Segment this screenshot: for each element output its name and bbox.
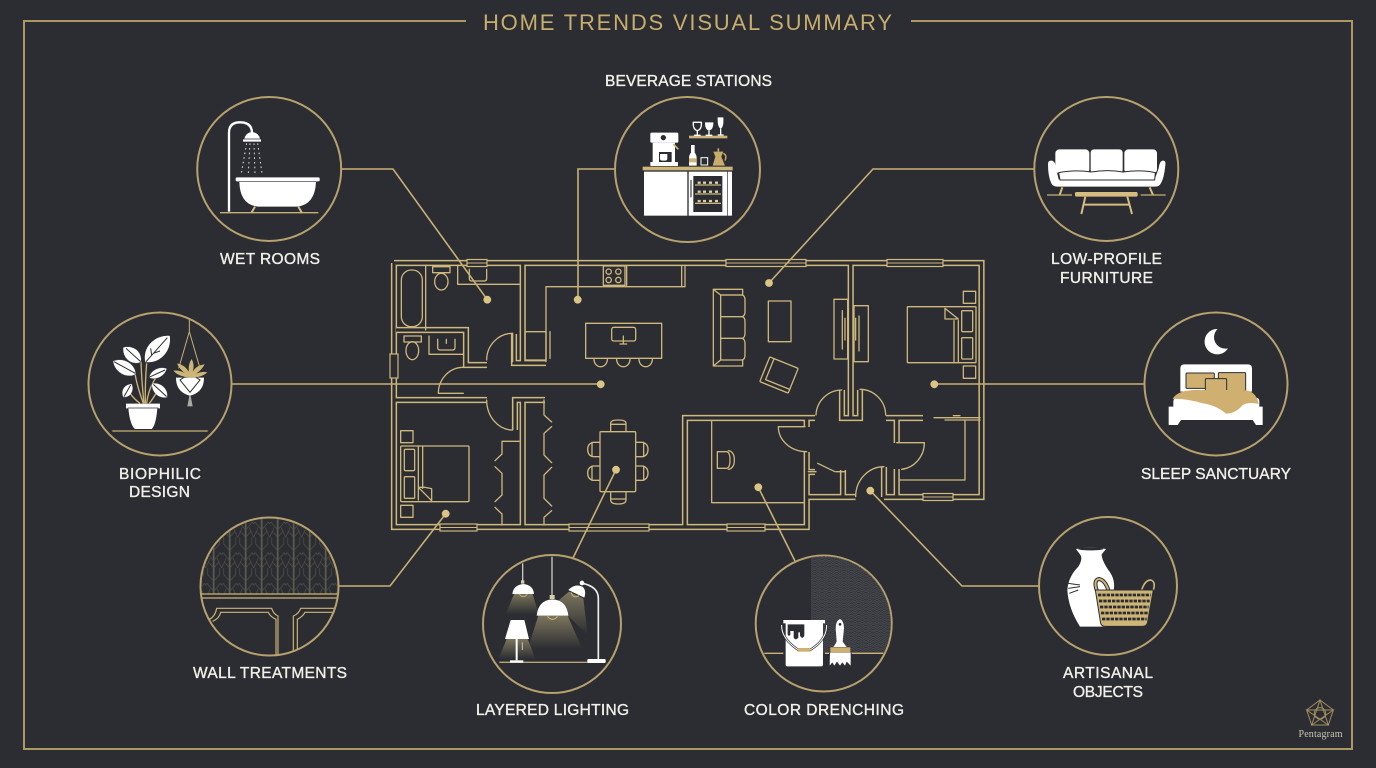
- leader: wall treatments: [338, 514, 446, 586]
- leader: artisanal objects: [870, 491, 1040, 586]
- trend: layered lighting: [476, 555, 629, 719]
- title: HOME TRENDS VISUAL SUMMARY: [483, 10, 892, 35]
- icon: art deco wallpaper and wainscoting: [200, 517, 340, 657]
- label: color drenching: COLOR DRENCHING: [744, 702, 904, 719]
- icon: shower and bathtub: [220, 122, 320, 213]
- icon: coffee bar: [643, 117, 733, 216]
- anchor dots: [442, 279, 938, 518]
- trend: wall treatments: [193, 517, 347, 682]
- icon: potted and hanging plants: [110, 320, 208, 431]
- label: biophilic design: DESIGN: [129, 484, 190, 501]
- trend: color drenching: [744, 555, 904, 719]
- label: artisanal objects: [1063, 665, 1153, 701]
- floor plan: [390, 260, 982, 531]
- label: artisanal objects: ARTISANAL: [1063, 665, 1153, 682]
- logo: pentagram: [1298, 700, 1343, 740]
- label: low-profile furniture: LOW-PROFILE: [1051, 251, 1162, 268]
- leader: layered lighting: [573, 470, 616, 558]
- label: sleep sanctuary: SLEEP SANCTUARY: [1141, 466, 1291, 483]
- label: layered lighting: LAYERED LIGHTING: [476, 702, 629, 719]
- leader: wet rooms: [341, 169, 487, 300]
- plan fixtures east wing: [712, 289, 980, 503]
- icon: pendant, table and floor lamps: [498, 557, 606, 663]
- plan walls: [394, 263, 982, 527]
- icon: paint bucket and brush: [764, 555, 894, 666]
- label: artisanal objects: OBJECTS: [1073, 684, 1143, 701]
- leader: sleep sanctuary: [934, 383, 1144, 385]
- icon: sofa and coffee table: [1047, 149, 1166, 214]
- trend: beverage stations: [605, 73, 772, 242]
- label: beverage stations: BEVERAGE STATIONS: [605, 73, 772, 90]
- trend: wet rooms: [197, 97, 341, 268]
- leader: beverage stations: [578, 169, 616, 300]
- label: biophilic design: BIOPHILIC: [119, 466, 201, 483]
- label: biophilic design: [119, 466, 201, 501]
- trend: sleep sanctuary: [1141, 312, 1291, 483]
- trend: low-profile furniture: [1034, 97, 1178, 287]
- label: wet rooms: WET ROOMS: [220, 251, 320, 268]
- icon: pentagon mark: [1307, 700, 1333, 725]
- leader: biophilic design: [231, 383, 601, 385]
- icon: vase and woven basket: [1067, 548, 1154, 627]
- leader: color drenching: [758, 487, 795, 561]
- trend: biophilic design: [88, 312, 232, 501]
- label: low-profile furniture: [1051, 251, 1162, 287]
- icon: bed and moon: [1169, 329, 1263, 425]
- plan windows: [390, 260, 953, 531]
- label: wall treatments: WALL TREATMENTS: [193, 665, 347, 682]
- label: low-profile furniture: FURNITURE: [1060, 270, 1153, 287]
- plan fixtures west wing: [401, 265, 685, 525]
- logo wordmark: Pentagram: [1298, 729, 1343, 740]
- leader: low-profile furniture: [769, 169, 1034, 283]
- trend: artisanal objects: [1039, 517, 1177, 701]
